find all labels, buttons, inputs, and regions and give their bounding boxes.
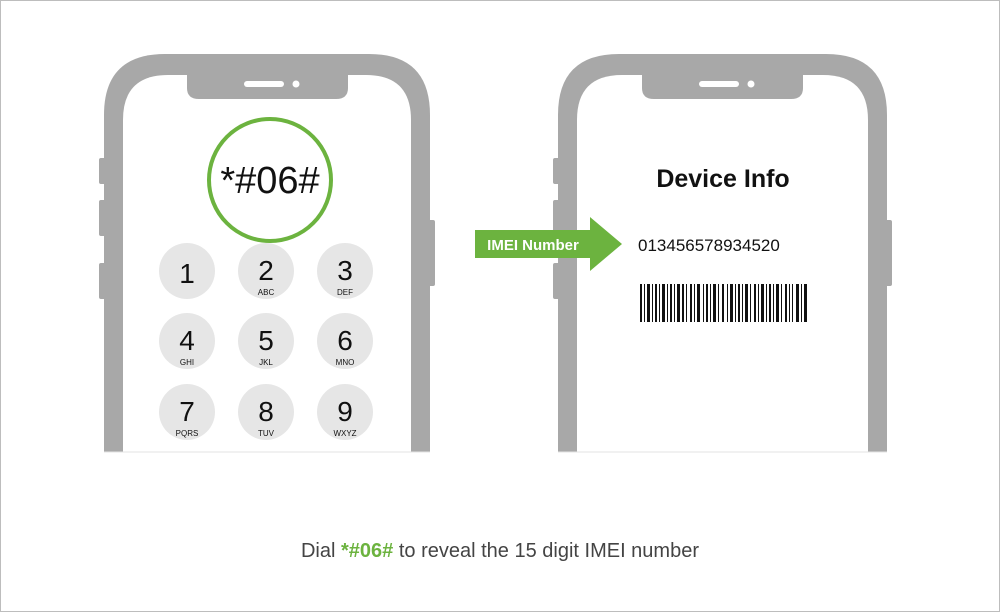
keypad: 8 bbox=[258, 396, 274, 427]
keypad: 9 bbox=[337, 396, 353, 427]
heading: Device Info: Device Info bbox=[656, 165, 790, 193]
IMEI number text: 013456578934520 bbox=[638, 236, 780, 255]
keypad: 3 bbox=[337, 255, 353, 286]
keypad bbox=[159, 243, 373, 440]
keypad: 7 bbox=[179, 396, 195, 427]
keypad: 4 bbox=[179, 325, 195, 356]
keypad: WXYZ bbox=[333, 429, 357, 438]
code circle bbox=[209, 119, 331, 241]
caption: Dial *#06# to reveal the 15 digit IMEI number bbox=[301, 540, 699, 562]
phone: device info bbox=[553, 54, 892, 452]
arrow: IMEI Number bbox=[475, 217, 622, 271]
keypad: GHI bbox=[180, 358, 194, 367]
keypad: TUV bbox=[258, 429, 275, 438]
code circle: *#06# bbox=[220, 160, 320, 202]
keypad: DEF bbox=[337, 288, 353, 297]
phone: dialer bbox=[99, 54, 435, 452]
barcode bbox=[640, 284, 807, 322]
arrow: IMEI Number: IMEI Number bbox=[487, 237, 579, 254]
keypad: PQRS bbox=[176, 429, 198, 438]
keypad: JKL bbox=[259, 358, 273, 367]
keypad: 2 bbox=[258, 255, 274, 286]
keypad: ABC bbox=[258, 288, 274, 297]
keypad: 1 bbox=[179, 258, 195, 289]
keypad: MNO bbox=[336, 358, 354, 367]
keypad: 5 bbox=[258, 325, 274, 356]
keypad: 6 bbox=[337, 325, 353, 356]
